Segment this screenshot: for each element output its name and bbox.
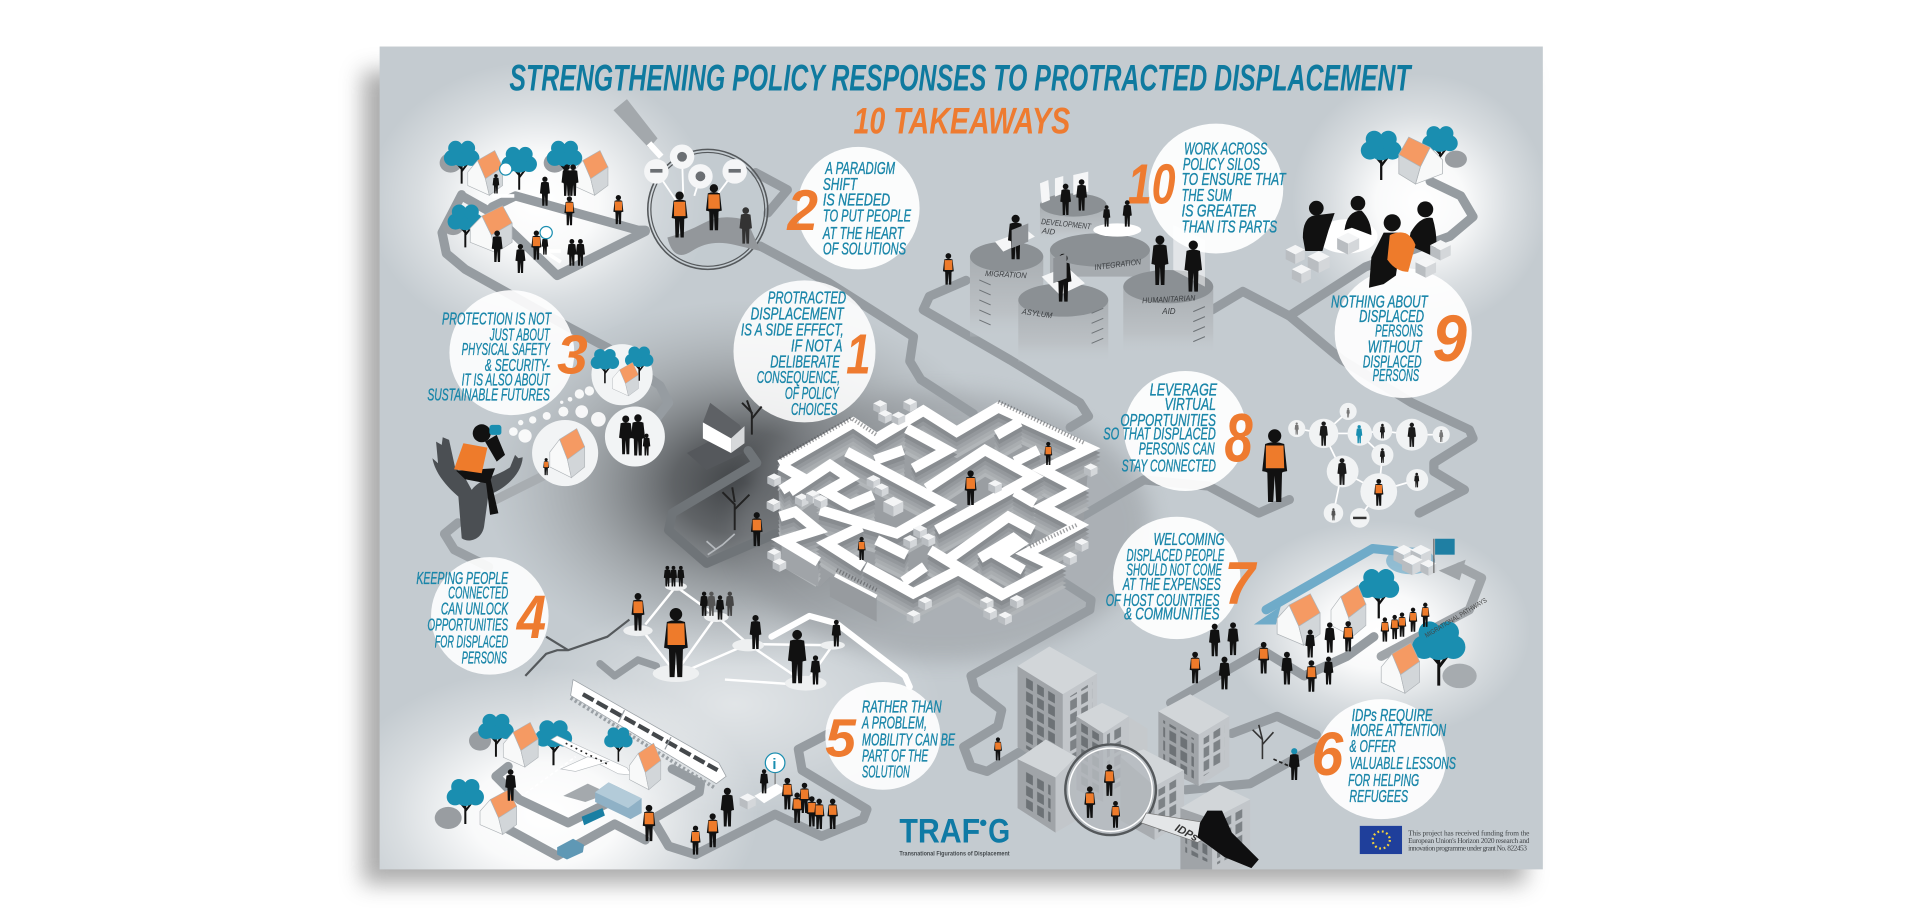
policy silos: DEVELOPMENT (1041, 217, 1092, 231)
welcoming village cluster: MIGRATIONAL PATHWAYS (1424, 597, 1489, 640)
takeaway 1: PROTRACTED (768, 288, 846, 308)
takeaway 8: 8 (1224, 400, 1253, 477)
takeaway 9: NOTHING ABOUT (1331, 291, 1429, 311)
TRAFIG logo (899, 812, 1010, 857)
takeaway 5: PART OF THE (862, 746, 929, 766)
takeaway 1: IS A SIDE EFFECT, (741, 319, 844, 339)
takeaway 8: PERSONS CAN (1139, 438, 1215, 458)
takeaway 6: MORE ATTENTION (1351, 720, 1446, 740)
takeaway 8: LEVERAGE (1150, 379, 1218, 399)
funding statement: innovation programme under grant No. 822453 (1408, 843, 1527, 852)
person running to city (994, 737, 1002, 760)
TRAFIG logo: Transnational Figurations of Displacement (899, 850, 1010, 857)
takeaway 3: 3 (557, 323, 588, 385)
takeaway 7: OF HOST COUNTRIES (1106, 590, 1220, 610)
arrow: migration pathway head (1439, 560, 1466, 580)
takeaway 6: & OFFER (1349, 736, 1396, 756)
top-right meeting cluster (1286, 126, 1467, 288)
takeaway 10: WORK ACROSS (1184, 138, 1268, 158)
takeaway 8: SO THAT DISPLACED (1103, 424, 1216, 444)
arrow: blue return head (1254, 606, 1281, 624)
takeaway 3 (427, 290, 588, 415)
takeaway 10: THE SUM (1182, 185, 1232, 205)
funding statement: European Union's Horizon 2020 research and (1408, 836, 1530, 845)
takeaway 2: A PARADIGM (825, 158, 896, 178)
takeaway 6: VALUABLE LESSONS (1349, 753, 1456, 773)
takeaway 1: DELIBERATE (770, 351, 840, 371)
takeaway 5: RATHER THAN (862, 697, 942, 717)
policy silos: HUMANITARIAN (1142, 294, 1196, 305)
bottom-left transport village (435, 680, 838, 860)
policy silos: MIGRATION (985, 269, 1027, 280)
takeaway 7: DISPLACED PEOPLE (1127, 545, 1225, 565)
takeaway 9 (1331, 268, 1472, 398)
takeaway 7: AT THE EXPENSES (1122, 574, 1221, 594)
takeaway 7: & COMMUNITIES (1124, 604, 1220, 624)
takeaway 1 (733, 280, 876, 422)
takeaway 9: 9 (1433, 302, 1467, 376)
takeaway 1: OF POLICY (785, 383, 840, 403)
magnifying glass on IDPs: IDPs (1173, 822, 1200, 844)
takeaway 8 (1103, 371, 1253, 491)
takeaway 3: & SECURITY- (485, 355, 550, 375)
takeaway 9: DISPLACED (1363, 351, 1422, 371)
person on road to silos (943, 253, 954, 285)
takeaway 5: SOLUTION (862, 762, 910, 782)
vision circle: school (532, 420, 598, 486)
takeaway 9: PERSONS (1375, 321, 1423, 341)
policy silos: AID (1040, 226, 1056, 237)
virtual network cluster (1262, 403, 1450, 528)
welcoming village cluster (1190, 539, 1489, 693)
takeaway 10: IS GREATER (1182, 201, 1256, 221)
takeaway 2: IS NEEDED (823, 190, 890, 210)
policy silos: ASYLUM (1020, 307, 1053, 320)
takeaway 5: MOBILITY CAN BE (862, 730, 955, 750)
takeaway 4: CONNECTED (448, 583, 508, 603)
background shading (380, 78, 1533, 870)
takeaway 2: TO PUT PEOPLE (823, 206, 911, 226)
vision circle: family (605, 407, 665, 467)
funding statement: This project has received funding from the (1408, 829, 1529, 838)
magnifying glass on people (613, 99, 768, 269)
takeaway 2: 2 (786, 179, 818, 243)
takeaway 3: PHYSICAL SAFETY (462, 339, 551, 359)
takeaway 4: FOR DISPLACED (435, 632, 508, 652)
takeaway 7: WELCOMING (1153, 529, 1224, 549)
takeaway 2: AT THE HEART (822, 223, 905, 243)
takeaway 4: 4 (515, 583, 546, 651)
takeaway 3: PROTECTION IS NOT (442, 308, 552, 328)
displaced persons network (623, 566, 845, 691)
takeaway 1: DISPLACEMENT (751, 304, 845, 324)
magnifying glass on IDPs (1065, 744, 1259, 868)
bottom-left transport village: i (772, 757, 777, 773)
thought bubbles (509, 386, 606, 443)
takeaway 4: OPPORTUNITIES (427, 615, 509, 635)
EU flag (1360, 826, 1402, 854)
policy silos (970, 172, 1213, 362)
takeaway 2 (786, 147, 920, 269)
takeaway 5: A PROBLEM, (861, 713, 927, 733)
funding statement (1408, 829, 1530, 852)
roads (442, 173, 1482, 856)
poster background (380, 47, 1543, 869)
subtitle: 10 TAKEAWAYS (853, 100, 1071, 141)
central maze (767, 398, 1098, 625)
takeaway 4: PERSONS (462, 648, 507, 668)
takeaway 10 (1128, 124, 1287, 253)
takeaway 1: CONSEQUENCE, (757, 367, 840, 387)
takeaway 1: IF NOT A (791, 335, 842, 355)
takeaway 9: PERSONS (1373, 365, 1419, 385)
top-left village (440, 141, 623, 273)
city buildings (1018, 647, 1250, 869)
takeaway 6: FOR HELPING (1348, 770, 1419, 790)
takeaway 8: STAY CONNECTED (1122, 455, 1216, 475)
vision circle: home (591, 344, 653, 405)
takeaway 3: JUST ABOUT (489, 324, 551, 344)
takeaway 10: THAN ITS PARTS (1182, 217, 1278, 237)
takeaway 3: SUSTAINABLE FUTURES (427, 384, 550, 404)
takeaway 6: 6 (1311, 720, 1344, 788)
takeaway 5: 5 (825, 709, 857, 769)
takeaway 10: TO ENSURE THAT (1182, 169, 1287, 189)
takeaway 7: 7 (1224, 550, 1257, 617)
takeaway 1: CHOICES (791, 399, 838, 419)
takeaway 2: SHIFT (823, 174, 858, 194)
takeaway 7: SHOULD NOT COME (1127, 559, 1222, 579)
takeaway 1: 1 (846, 322, 871, 385)
title: STRENGTHENING POLICY RESPONSES TO PROTRACTED DISPLACEMENT (509, 58, 1413, 99)
policy silos: AID (1161, 307, 1176, 316)
takeaway 4: CAN UNLOCK (441, 599, 509, 619)
takeaway 4 (416, 557, 549, 675)
takeaway 8: OPPORTUNITIES (1120, 410, 1216, 430)
takeaway 10: 10 (1128, 152, 1176, 215)
policy silos: INTEGRATION (1094, 257, 1142, 272)
takeaway 4: KEEPING PEOPLE (416, 568, 509, 588)
crack in the ground (525, 620, 629, 676)
takeaway 3: IT IS ALSO ABOUT (462, 370, 551, 390)
takeaway 9: DISPLACED (1359, 306, 1424, 326)
takeaway 7 (1106, 517, 1257, 639)
takeaway 10: POLICY SILOS (1183, 154, 1260, 174)
takeaway 6 (1311, 699, 1456, 819)
TRAFIG logo: G (988, 812, 1010, 850)
takeaway 5 (825, 682, 955, 790)
takeaway 6: IDPs REQUIRE (1352, 705, 1433, 725)
takeaway 9: WITHOUT (1368, 337, 1423, 357)
TRAFIG logo: TRAF (899, 812, 980, 850)
abandoned house and bare trees (687, 400, 763, 555)
page shadow (362, 71, 1526, 884)
takeaway 8: VIRTUAL (1164, 394, 1216, 414)
takeaway 6: REFUGEES (1349, 786, 1408, 806)
takeaway 2: OF SOLUTIONS (823, 239, 906, 259)
checkpoint and bare tree (1253, 725, 1300, 780)
person sitting on hands with binoculars (432, 424, 523, 540)
